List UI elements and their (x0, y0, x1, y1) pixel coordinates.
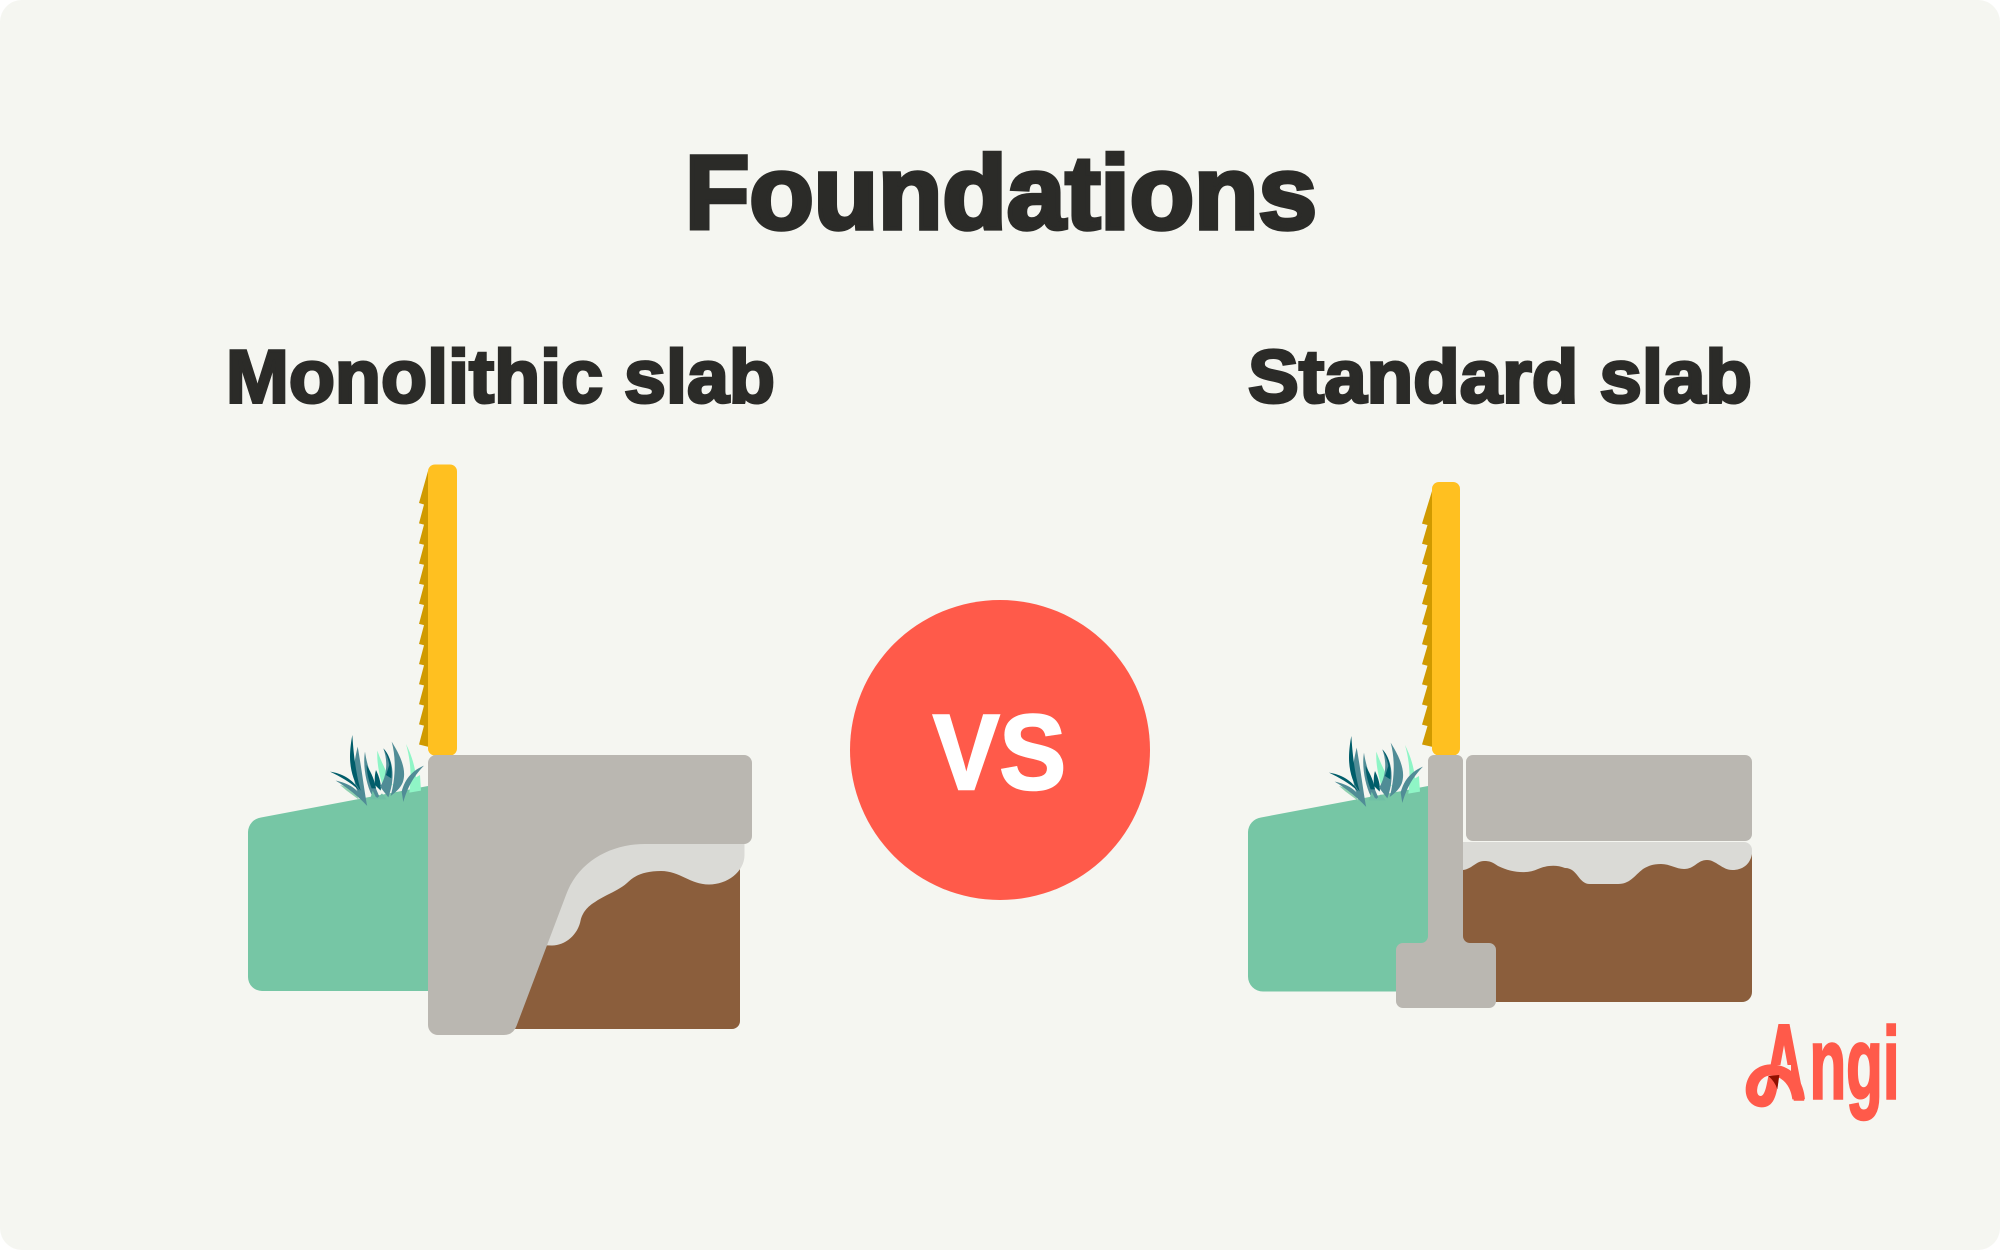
stem wall and footing (1396, 755, 1496, 1008)
logo: Angi (1746, 1023, 1896, 1122)
grass tuft (1329, 736, 1423, 807)
gravel layer (1463, 842, 1752, 884)
vs badge (850, 600, 1150, 900)
concrete slab (1466, 755, 1752, 841)
brown soil (500, 860, 740, 1029)
logo: Angi: ngi (1810, 1006, 1900, 1120)
grass tuft (330, 735, 424, 806)
vs badge: VS (933, 692, 1066, 812)
title: Foundations (685, 136, 1317, 252)
brown soil (1463, 850, 1752, 1002)
diagram: monolithic slab (248, 464, 752, 1035)
soil: green left side (1248, 786, 1428, 992)
monolithic concrete slab (428, 755, 752, 1035)
survey stake with teeth (1422, 482, 1460, 756)
soil: green left side (248, 786, 428, 991)
logo: Angi: A (1764, 1004, 1804, 1122)
heading: standard slab: Standard slab (1248, 334, 1752, 418)
diagram: standard slab (1248, 482, 1752, 1008)
heading: monolithic slab: Monolithic slab (226, 334, 775, 418)
gravel layer (530, 838, 744, 946)
survey stake with teeth (419, 464, 457, 756)
